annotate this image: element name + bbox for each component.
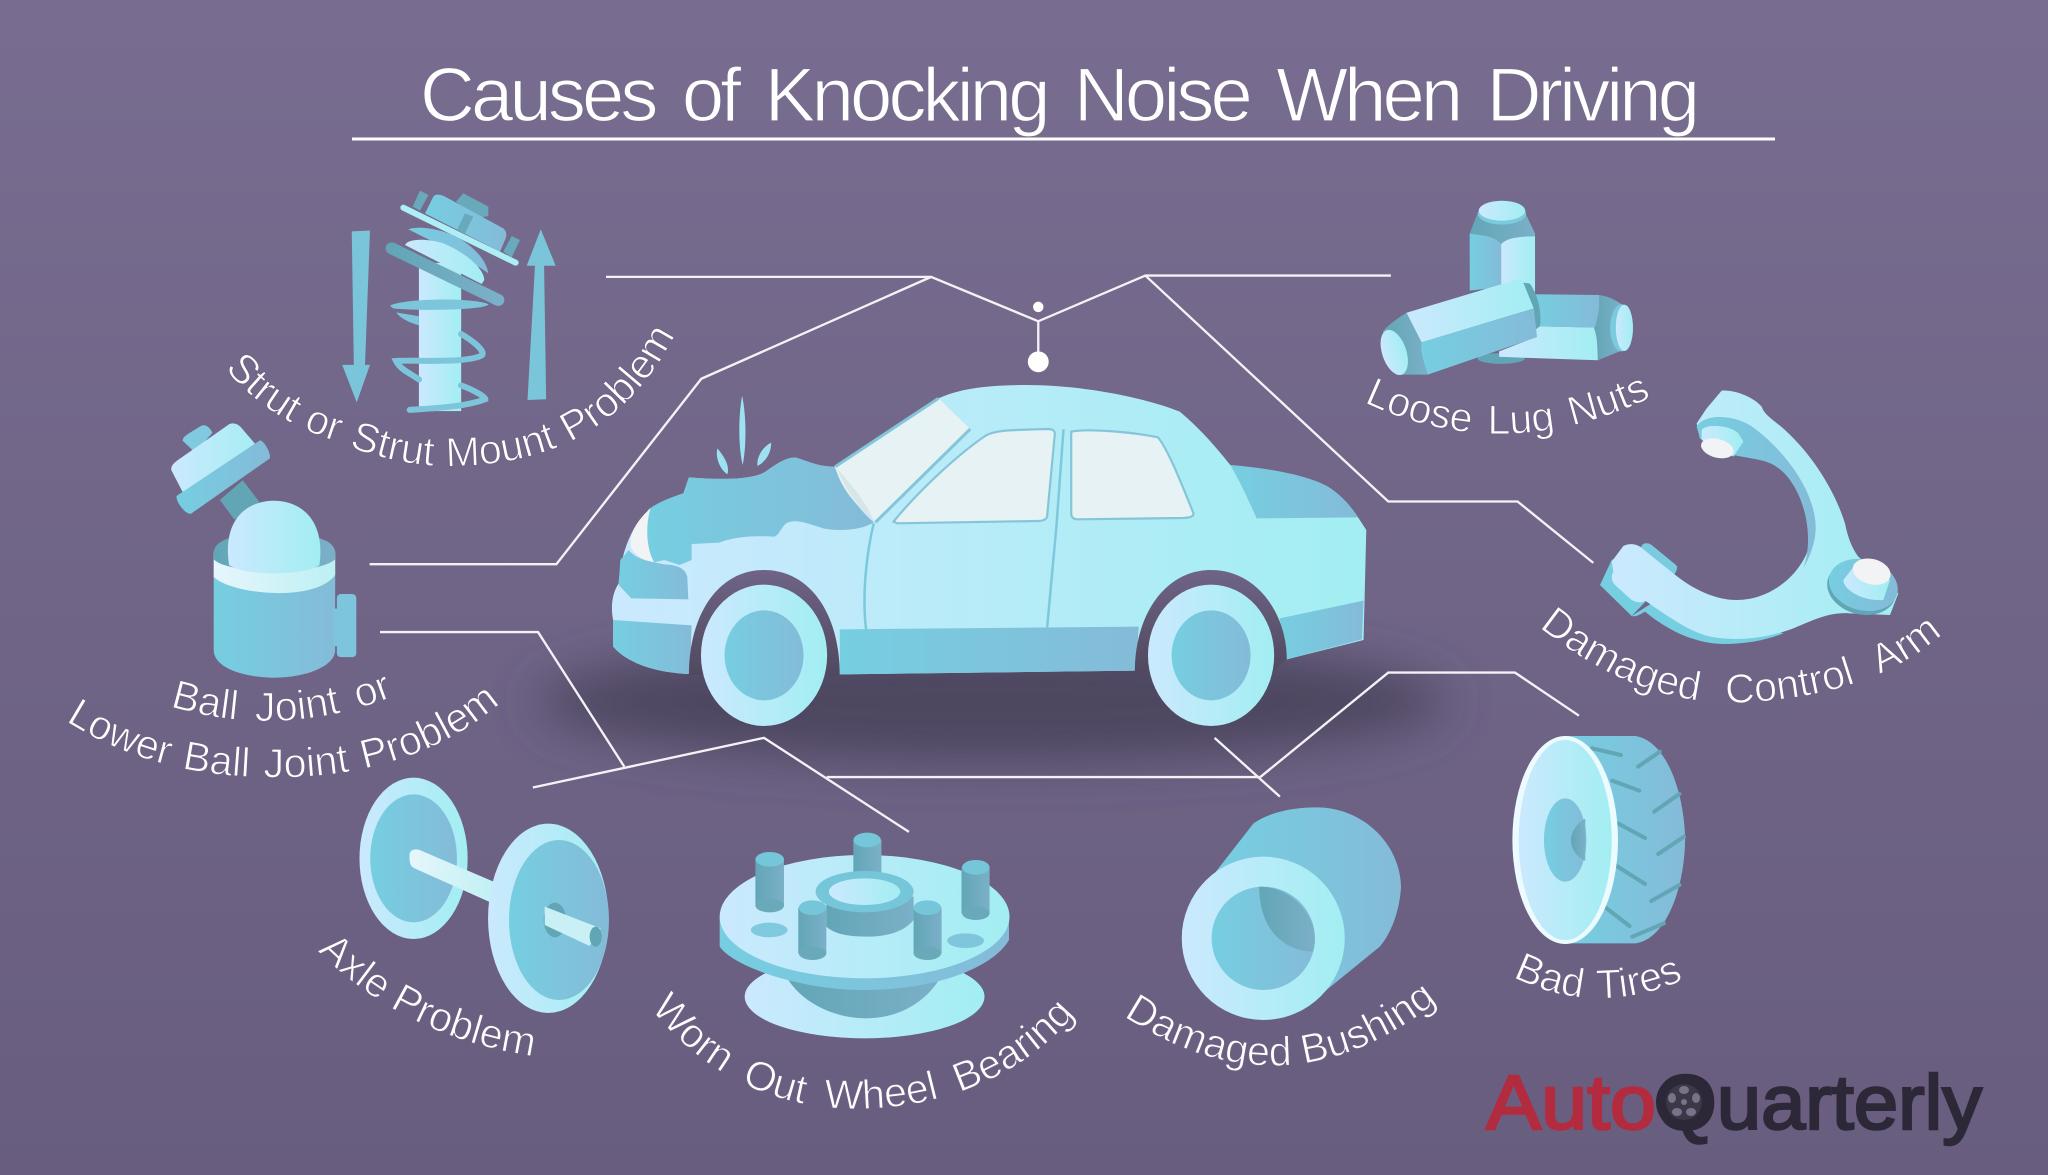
steam sparks xyxy=(717,396,771,474)
label: control arm: Damaged Control Arm xyxy=(1542,607,1940,703)
door lines xyxy=(864,429,1064,629)
label: strut: Strut or Strut Mount Problem xyxy=(230,328,674,466)
arrows, rod and lower coils xyxy=(342,229,556,411)
strut mount and top coil xyxy=(392,191,520,300)
icon: tire xyxy=(1512,736,1685,944)
label: lug nuts: Loose Lug Nuts xyxy=(1367,378,1648,439)
side windows xyxy=(893,429,1194,523)
connector lines xyxy=(370,276,1593,832)
icon: axle xyxy=(359,778,609,1013)
icon: strut and spring xyxy=(342,191,556,411)
label: ball joint line two: Lower Ball Joint Problem xyxy=(69,690,498,778)
trunk shade xyxy=(1230,465,1358,518)
logo: Auto xyxy=(1486,1060,1656,1146)
car body xyxy=(612,385,1366,674)
grille xyxy=(619,550,688,599)
front wheel xyxy=(689,570,840,726)
windshield xyxy=(835,398,970,522)
lower body panels xyxy=(613,601,1364,674)
label: bushing: Damaged Bushing xyxy=(1126,986,1437,1070)
car shadow xyxy=(537,642,1447,762)
crumpled hood xyxy=(647,458,874,565)
logo: Quarterly xyxy=(1655,1060,1983,1146)
icon: loose lug nuts xyxy=(1376,201,1633,378)
label: wheel bearing: Worn Out Wheel Bearing xyxy=(656,990,1076,1109)
rear wheel xyxy=(1135,570,1287,726)
icon: bushing xyxy=(1182,807,1401,1020)
icon: wheel in Q xyxy=(1656,1074,1712,1130)
label: tires: Bad Tires xyxy=(1516,953,1680,998)
headlight xyxy=(631,508,653,562)
icon: control arm xyxy=(1600,391,1904,644)
title: Causes of Knocking Noise When Driving xyxy=(420,53,1700,138)
car xyxy=(612,385,1366,726)
labels xyxy=(69,328,1940,1109)
label: axle: Axle Problem xyxy=(318,938,533,1056)
icon: ball joint xyxy=(171,423,356,678)
logo xyxy=(1486,1060,1983,1146)
icon: wheel bearing hub xyxy=(720,833,1009,1038)
label: ball joint line one: Ball Joint or xyxy=(174,676,386,721)
